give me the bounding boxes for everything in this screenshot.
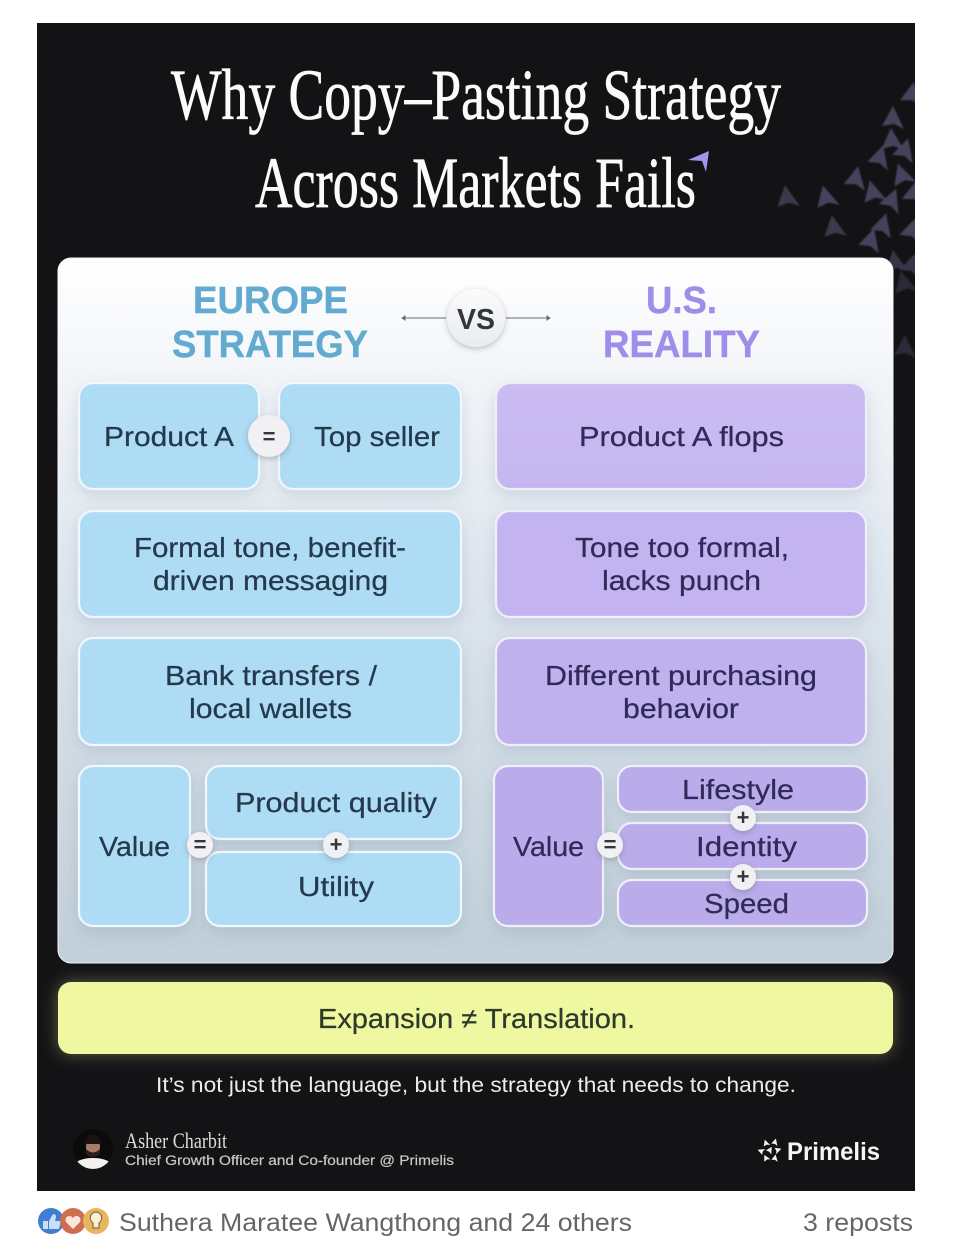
icon: purple arrow accent	[688, 151, 709, 172]
author name and role: Chief Growth Officer and Co-founder @ Primelis	[125, 1153, 454, 1168]
author name and role: Asher Charbit	[125, 1128, 227, 1153]
comparison panel	[58, 258, 893, 963]
row 4 U.S.: value equation: Value	[513, 831, 584, 862]
VS badge with arrows	[402, 289, 550, 347]
row 3 Europe: payments	[79, 638, 461, 745]
row 2 U.S.: tone: lacks punch	[602, 565, 761, 596]
heading: U.S. reality: REALITY	[603, 324, 760, 366]
row 2 Europe: messaging: Formal tone, benefit-	[134, 532, 406, 563]
row 1 Europe: Product A = Top seller	[79, 383, 461, 489]
icon: reactions	[38, 1208, 109, 1234]
row 4 Europe: value equation: Product quality	[235, 787, 437, 818]
callout: Expansion is not Translation: Expansion ≠ Translation.	[318, 1003, 635, 1034]
row 3 U.S.: purchasing behavior: behavior	[623, 693, 739, 724]
title: Across Markets Fails	[255, 143, 696, 223]
row 1 Europe: Product A = Top seller: Top seller	[314, 421, 440, 452]
reaction names: Suthera Maratee Wangthong and 24 others	[119, 1209, 632, 1237]
heading: Europe strategy: EUROPE	[193, 280, 348, 322]
row 4 Europe: value equation: Utility	[298, 871, 374, 902]
row 4 Europe: value equation: =	[194, 832, 206, 857]
row 4 U.S.: value equation: Lifestyle	[682, 774, 794, 805]
row 3 U.S.: purchasing behavior	[496, 638, 866, 745]
row 4 Europe: value equation: Value	[99, 831, 170, 862]
row 4 U.S.: value equation: +	[737, 864, 749, 889]
heading: Europe strategy: STRATEGY	[172, 324, 368, 366]
row 4 Europe: value equation: +	[330, 832, 342, 857]
heading: U.S. reality: U.S.	[646, 280, 717, 322]
row 4 U.S.: value equation: =	[604, 832, 616, 857]
row 1 Europe: Product A = Top seller: Product A	[104, 421, 234, 452]
logo: Primelis: Primelis	[787, 1138, 880, 1166]
title	[171, 55, 781, 223]
row 1 U.S.: Product A flops: Product A flops	[579, 421, 784, 452]
subtitle text: It’s not just the language, but the strategy that needs to change.	[156, 1074, 796, 1097]
author name and role	[125, 1128, 454, 1168]
heading: U.S. reality	[603, 280, 760, 366]
row 4 U.S.: value equation: Identity	[696, 831, 797, 862]
row 4 U.S.: value equation	[494, 766, 867, 926]
repost count: 3 reposts	[803, 1209, 913, 1237]
row 4 Europe: value equation	[79, 766, 461, 926]
callout: Expansion is not Translation	[58, 982, 893, 1054]
row 4 U.S.: value equation: +	[737, 805, 749, 830]
decorative arrow flock	[777, 82, 915, 358]
row 2 Europe: messaging	[79, 511, 461, 617]
row 1 U.S.: Product A flops	[496, 383, 866, 489]
heading: Europe strategy	[172, 280, 368, 366]
row 3 U.S.: purchasing behavior: Different purchasing	[545, 660, 817, 691]
row 4 U.S.: value equation: Speed	[704, 888, 789, 919]
icon: author avatar	[73, 1129, 113, 1169]
row 1 Europe: Product A = Top seller: =	[263, 424, 275, 449]
row 2 U.S.: tone: Tone too formal,	[575, 532, 789, 563]
row 2 U.S.: tone	[496, 511, 866, 617]
row 2 Europe: messaging: driven messaging	[153, 565, 388, 596]
row 3 Europe: payments: local wallets	[189, 693, 352, 724]
VS badge with arrows: VS	[457, 304, 495, 336]
row 3 Europe: payments: Bank transfers /	[165, 660, 377, 691]
